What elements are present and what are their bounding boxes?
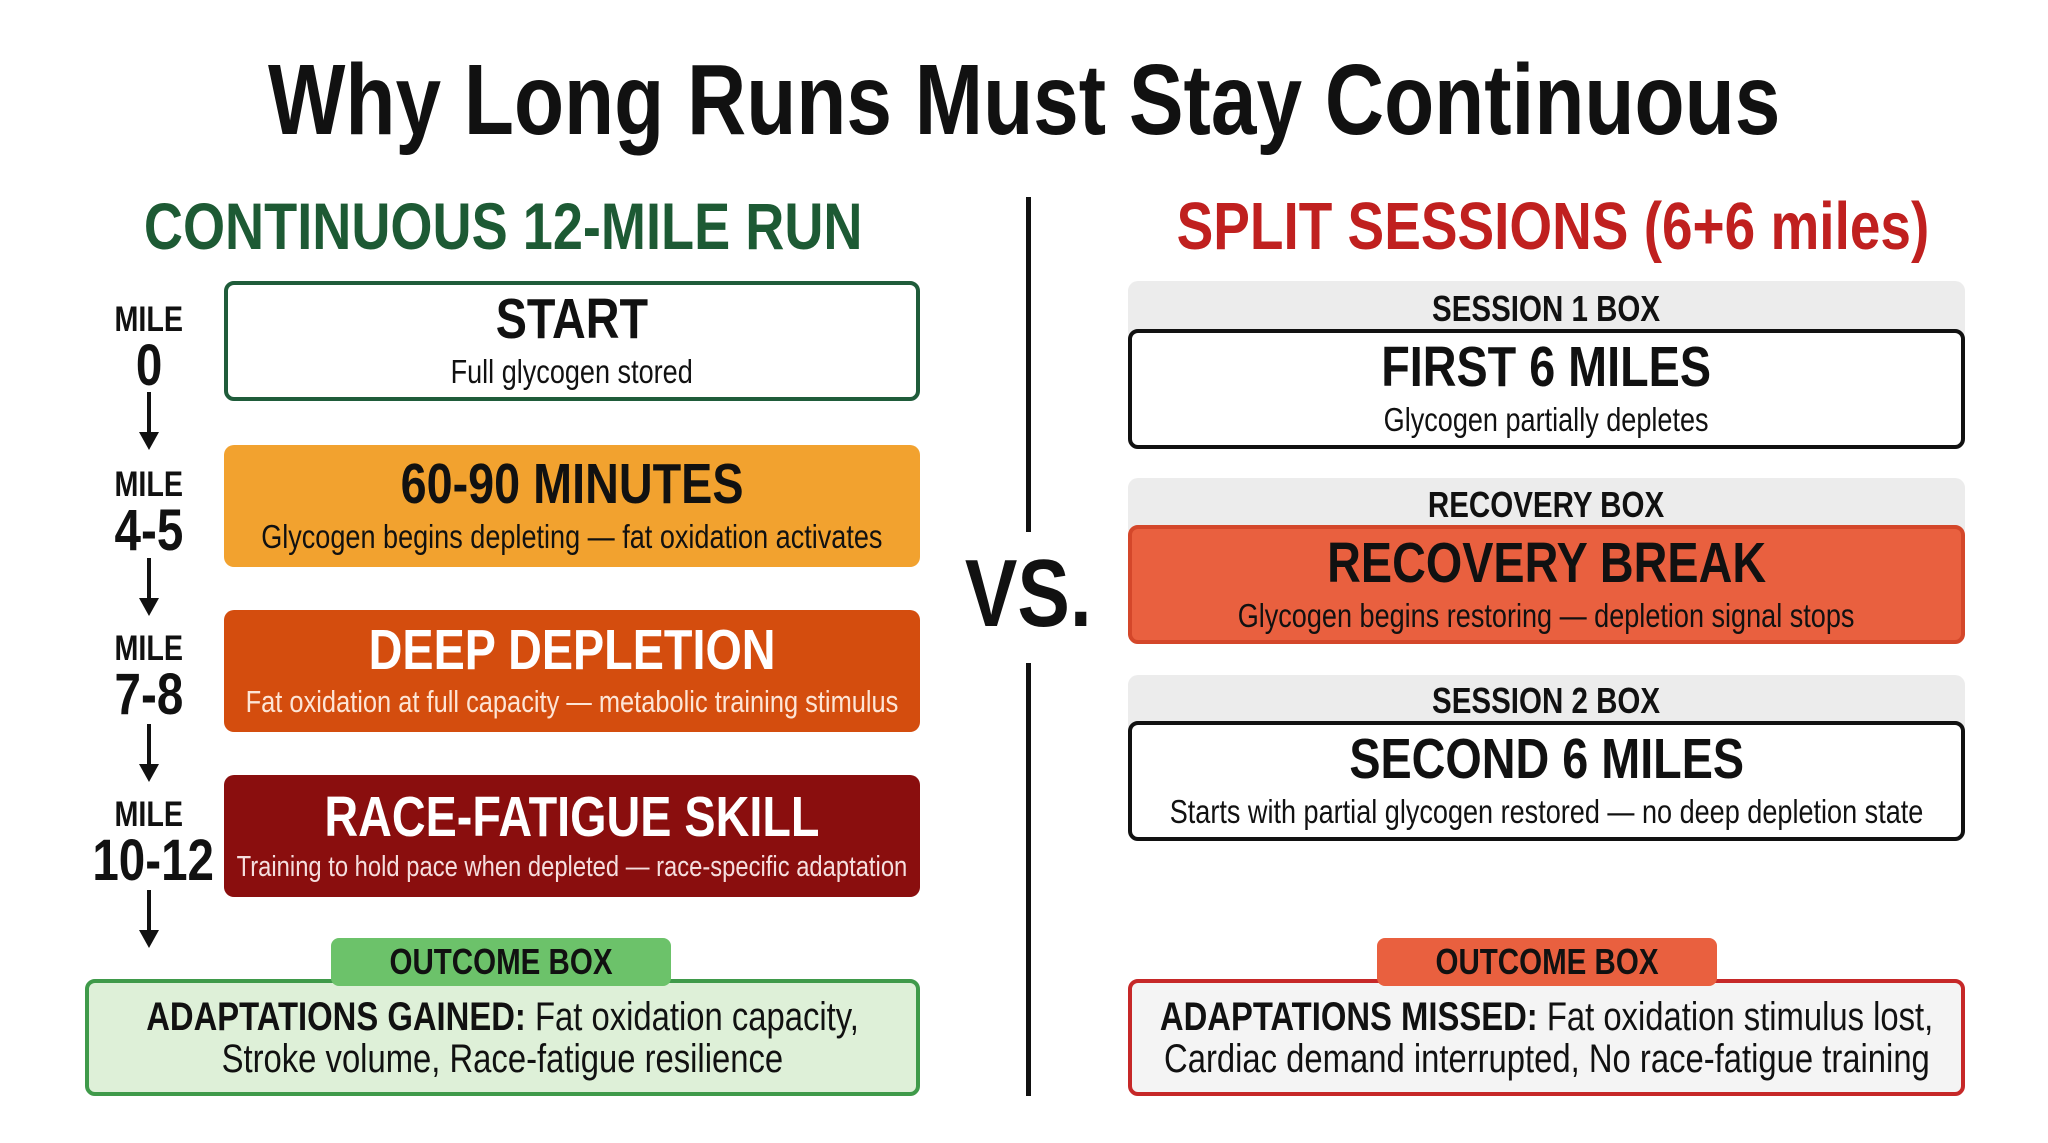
- mile 10-12: 10-12: [92, 828, 214, 893]
- box: second 6 miles: [1128, 721, 1965, 841]
- box: race-fatigue skill: [224, 775, 920, 897]
- outcome box left: Stroke volume, Race-fatigue resilience: [222, 1036, 783, 1080]
- outcome tab left: [331, 938, 671, 986]
- outcome box right: [1128, 979, 1965, 1096]
- box: second 6 miles: SECOND 6 MILES: [1349, 727, 1744, 791]
- mile 10-12: MILE: [115, 795, 183, 834]
- mile 4-5: [115, 465, 183, 563]
- box: 60-90 minutes: 60-90 MINUTES: [401, 452, 743, 516]
- box: deep depletion: DEEP DEPLETION: [369, 618, 775, 682]
- box: 60-90 minutes: Glycogen begins depleting — fat oxidation activates: [261, 518, 883, 555]
- arrow 2: [139, 558, 159, 616]
- mile 7-8: [115, 629, 183, 727]
- mile 0: 0: [136, 333, 162, 398]
- box: deep depletion: [224, 610, 920, 732]
- box: deep depletion: Fat oxidation at full capacity — metabolic training stimulus: [246, 684, 898, 719]
- box: recovery break: Glycogen begins restoring — depletion signal stops: [1238, 597, 1855, 634]
- mile 0: [115, 300, 183, 398]
- divider bottom: [1026, 663, 1031, 1096]
- session 2 group: [1128, 675, 1965, 735]
- box: first 6 miles: Glycogen partially depletes: [1384, 401, 1709, 438]
- mile 4-5: MILE: [115, 465, 183, 504]
- box: recovery break: [1128, 525, 1965, 644]
- session 1 group: [1128, 281, 1965, 341]
- box: recovery break: RECOVERY BREAK: [1327, 531, 1766, 595]
- box: second 6 miles: Starts with partial glycogen restored — no deep depletion state: [1170, 793, 1923, 830]
- box: start: [224, 281, 920, 401]
- outcome box left: [85, 979, 920, 1096]
- vs label: VS.: [965, 540, 1091, 647]
- outcome box right: ADAPTATIONS MISSED: Fat oxidation stimulus lost,: [1160, 994, 1933, 1038]
- arrow 3: [139, 724, 159, 782]
- box: first 6 miles: [1128, 329, 1965, 449]
- outcome box right: Cardiac demand interrupted, No race-fatigue training: [1164, 1036, 1929, 1080]
- heading: split: SPLIT SESSIONS (6+6 miles): [1177, 189, 1929, 264]
- mile 7-8: 7-8: [115, 662, 183, 727]
- mile 0: MILE: [115, 300, 183, 339]
- mile 4-5: 4-5: [115, 498, 183, 563]
- session 1 label: SESSION 1 BOX: [1432, 288, 1661, 329]
- box: race-fatigue skill: RACE-FATIGUE SKILL: [324, 785, 820, 849]
- outcome box left: ADAPTATIONS GAINED: Fat oxidation capacity,: [146, 994, 859, 1038]
- divider top: [1026, 197, 1031, 532]
- arrow 4: [139, 890, 159, 948]
- mile 7-8: MILE: [115, 629, 183, 668]
- heading: continuous: CONTINUOUS 12-MILE RUN: [144, 189, 862, 263]
- box: 60-90 minutes: [224, 445, 920, 567]
- recovery group: [1128, 478, 1965, 538]
- outcome tab left: OUTCOME BOX: [389, 941, 613, 982]
- recovery label: RECOVERY BOX: [1428, 484, 1665, 525]
- outcome tab right: [1377, 938, 1717, 986]
- box: race-fatigue skill: Training to hold pace when depleted — race-specific adaptation: [237, 851, 907, 883]
- mile 10-12: [92, 795, 214, 893]
- arrow 1: [139, 392, 159, 450]
- outcome tab right: OUTCOME BOX: [1435, 941, 1659, 982]
- box: start: START: [496, 287, 648, 351]
- box: first 6 miles: FIRST 6 MILES: [1382, 335, 1711, 399]
- title: Why Long Runs Must Stay Continuous: [268, 44, 1780, 156]
- box: start: Full glycogen stored: [451, 353, 693, 390]
- session 2 label: SESSION 2 BOX: [1432, 680, 1661, 721]
